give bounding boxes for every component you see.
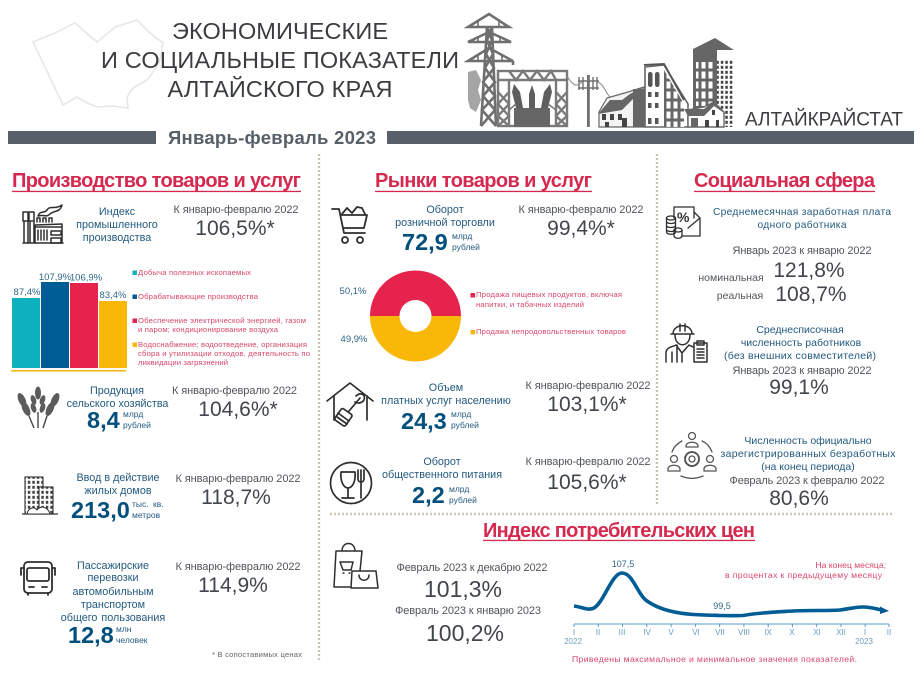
label: paid services [381,382,511,434]
line chart: monthly CPI: I [573,628,575,637]
icon: wage envelope: % [677,209,690,225]
value: housing [176,473,300,509]
bar chart: industry breakdown: 106,9% [70,272,103,284]
chart note: в процентах к предыдущему месяцу [725,570,883,580]
line chart: monthly CPI: 99,5 [713,601,731,611]
line chart: monthly CPI: 107,5 [612,559,634,569]
label: agriculture: 8,4 [87,407,120,433]
label: retail [395,204,495,255]
values: CPI: 100,2% [426,620,504,646]
legend: industry breakdown: сбора и утилизации отходов, деятельность по [138,349,310,358]
value: catering: 105,6%* [547,471,627,494]
region map silhouette [33,20,163,108]
panel: consumer price index [334,520,891,664]
value: unemployed: 80,6% [769,487,829,510]
bar chart: industry breakdown: 87,4% [14,287,41,298]
chart note [725,560,886,580]
label: catering: рублей [449,495,477,505]
line chart: monthly CPI: I [864,628,866,637]
icon: bus [21,562,55,595]
donut chart: retail structure: 50,1% [340,286,367,297]
donut chart: retail structure: 49,9% [341,334,368,345]
label: paid services: млрд [451,409,471,419]
title: АЛТАЙСКОГО КРАЯ [168,75,392,102]
label: housing: Ввод в действие [76,472,160,484]
icon: people with gear [668,432,716,478]
legend: retail structure [470,290,626,336]
values: CPI: 101,3% [424,576,502,602]
icon: factory [23,205,63,243]
line chart: monthly CPI: III [619,628,625,637]
value: agriculture: 104,6%* [198,398,278,421]
value: headcount: Январь 2023 к январю 2022 [732,365,872,377]
heading: CPI: Индекс потребительских цен [483,520,755,542]
label: average wage: одного работника [758,219,847,231]
icon: house with tools [327,383,373,427]
donut chart: retail structure [340,270,461,362]
line chart: monthly CPI: VII [715,628,725,637]
icon: wheat [16,386,61,428]
value: housing: 118,7% [201,486,271,509]
legend: retail structure: Продажа пищевых продуктов, включая [476,290,622,299]
label: paid services: Объем [429,382,463,394]
line chart: monthly CPI [564,559,891,646]
label: headcount: (без внешних совместителей) [724,350,876,362]
icon: shopping cart [332,207,367,243]
value: paid services: 103,1%* [547,393,627,416]
label: passenger transport: перевозки [87,572,139,584]
value: industrial index: К январю-февралю 2022 [174,204,298,216]
agency name: АЛТАЙКРАЙСТАТ [745,108,903,130]
value: average wage: 121,8% [773,259,845,282]
value: headcount: 99,1% [769,376,829,399]
label: housing [71,472,164,523]
label: catering: млрд [449,484,469,494]
values: CPI [395,562,548,646]
heading: markets: Рынки товаров и услуг [375,170,592,192]
value: housing: К январю-февралю 2022 [176,473,300,485]
label: housing: 213,0 [71,497,130,523]
value: unemployed: Февраль 2023 к февралю 2022 [730,475,884,487]
label: unemployed: Численность официально [744,435,872,447]
label: retail: рублей [452,242,480,252]
label: retail: розничной торговли [395,217,495,229]
line chart: monthly CPI: IV [643,628,651,637]
value: passenger transport: К январю-февралю 2022 [176,561,300,573]
legend: industry breakdown: Обеспечение электрической энергией, газом [138,316,306,325]
icon: residential buildings [22,477,58,514]
value: industrial index [174,204,298,240]
line chart: monthly CPI: II [887,628,891,637]
legend: retail structure: Продажа непродовольственных товаров [476,327,626,336]
panel: social sphere [666,170,896,510]
label: catering: Оборот [423,456,461,468]
label: passenger transport: Пассажирские [77,560,149,572]
line chart: monthly CPI: IX [764,628,772,637]
heading: social: Социальная сфера [694,170,876,192]
value: catering [526,456,650,494]
value: average wage [698,245,872,306]
label: average wage [713,206,891,231]
value: catering: К январю-февралю 2022 [526,456,650,468]
legend: retail structure: напитки, и табачных изделий [476,300,584,309]
label: average wage: Среднемесячная заработная плата [713,206,891,218]
value: agriculture: К январю-февралю 2022 [172,385,297,397]
label: industrial production index: промышленного [76,219,158,231]
icon: shopping bags [334,544,378,588]
value: unemployed [730,475,884,510]
value: paid services [526,380,650,416]
value: retail: 99,4%* [547,217,615,240]
label: unemployed: (на конец периода) [761,461,855,473]
value: average wage: 108,7% [775,283,847,306]
icon: wage envelope [666,207,700,238]
value: average wage: реальная [717,290,763,302]
legend: industry breakdown: Добыча полезных ископаемых [138,268,251,277]
label: housing: тыс. кв. [132,499,164,509]
label: headcount [724,324,876,362]
value: passenger transport [176,561,300,597]
title [101,18,459,102]
legend: industry breakdown: Обрабатывающие производства [138,292,259,301]
label: passenger transport: автомобильным [72,586,154,598]
line chart: monthly CPI: VIII [738,628,750,637]
legend: industry breakdown: и паром; кондиционирование воздуха [138,325,279,334]
value: passenger transport: 114,9% [198,574,268,597]
label: agriculture: Продукция [90,385,144,397]
value: retail [518,204,644,240]
legend: industry breakdown: Водоснабжение; водоотведение, организация [138,340,307,349]
label: agriculture: сельского хозяйства [67,398,168,410]
label: headcount: Среднесписочная [756,324,844,336]
footnote: * В сопоставимых ценах [212,650,302,659]
line chart: monthly CPI: 2023 [855,637,873,646]
label: retail: млрд [452,231,472,241]
label: paid services: 24,3 [401,408,447,434]
line chart: monthly CPI: 2022 [564,637,582,646]
icon: worker with clipboard [666,324,707,362]
value: industrial index: 106,5%* [195,217,275,240]
label: housing: метров [132,510,161,520]
chart note: На конец месяца; [815,560,886,570]
label: passenger transport: транспортом [81,599,145,611]
legend: industry breakdown [132,268,310,367]
label: industrial production index [76,206,158,244]
label: retail: Оборот [426,204,464,216]
panel: production of goods and services [11,170,310,659]
title: ЭКОНОМИЧЕСКИЕ [172,18,388,44]
label: unemployed: зарегистрированных безработных [720,448,896,460]
label: industrial production index: Индекс [99,206,136,218]
heading: production: Производство товаров и услуг [12,170,301,192]
line chart: monthly CPI: XI [813,628,821,637]
label: passenger transport: млн [116,624,132,634]
period bar [8,127,914,148]
value: average wage: Январь 2023 к январю 2022 [732,245,872,257]
line chart: monthly CPI: V [668,628,674,637]
label: passenger transport: 12,8 [68,622,114,648]
bar chart: industry breakdown: 83,4% [100,290,127,301]
label: retail: 72,9 [402,229,448,255]
line chart: monthly CPI: VI [692,628,700,637]
value: headcount [732,365,872,399]
values: CPI: Февраль 2023 к январю 2023 [395,605,541,617]
label: agriculture: млрд [123,409,143,419]
label: housing: жилых домов [84,485,152,497]
bar chart: industry breakdown [11,272,127,372]
chart footnote: Приведены максимальное и минимальное значения показателей. [572,654,857,664]
line chart: monthly CPI: XII [836,628,846,637]
value: average wage: номинальная [698,272,764,284]
bar chart: industry breakdown: 107,9% [39,272,72,283]
line chart: monthly CPI: X [789,628,795,637]
label: agriculture: рублей [123,420,151,430]
title: И СОЦИАЛЬНЫЕ ПОКАЗАТЕЛИ [101,47,459,73]
label: headcount: численность работников [741,337,862,349]
label: agriculture [67,385,168,433]
label: catering: общественного питания [382,469,502,481]
label: unemployed [720,435,896,473]
label: industrial production index: производства [83,232,151,244]
label: catering: 2,2 [412,482,445,508]
label: catering [382,456,502,508]
values: CPI: Февраль 2023 к декабрю 2022 [396,562,548,574]
value: agriculture [172,385,297,421]
icon: glass and fork [330,462,372,504]
panel: markets of goods and services [327,170,650,508]
label: passenger transport [61,560,165,648]
period bar: Январь-февраль 2023 [168,127,376,148]
value: retail: К январю-февралю 2022 [518,204,644,216]
label: passenger transport: человек [116,635,148,645]
skyline illustration [468,14,734,127]
legend: industry breakdown: ликвидации загрязнений [138,358,228,367]
line chart: monthly CPI: II [596,628,600,637]
label: paid services: платных услуг населению [381,395,511,407]
label: paid services: рублей [451,420,479,430]
label: passenger transport: общего пользования [61,612,165,624]
value: paid services: К январю-февралю 2022 [526,380,650,392]
